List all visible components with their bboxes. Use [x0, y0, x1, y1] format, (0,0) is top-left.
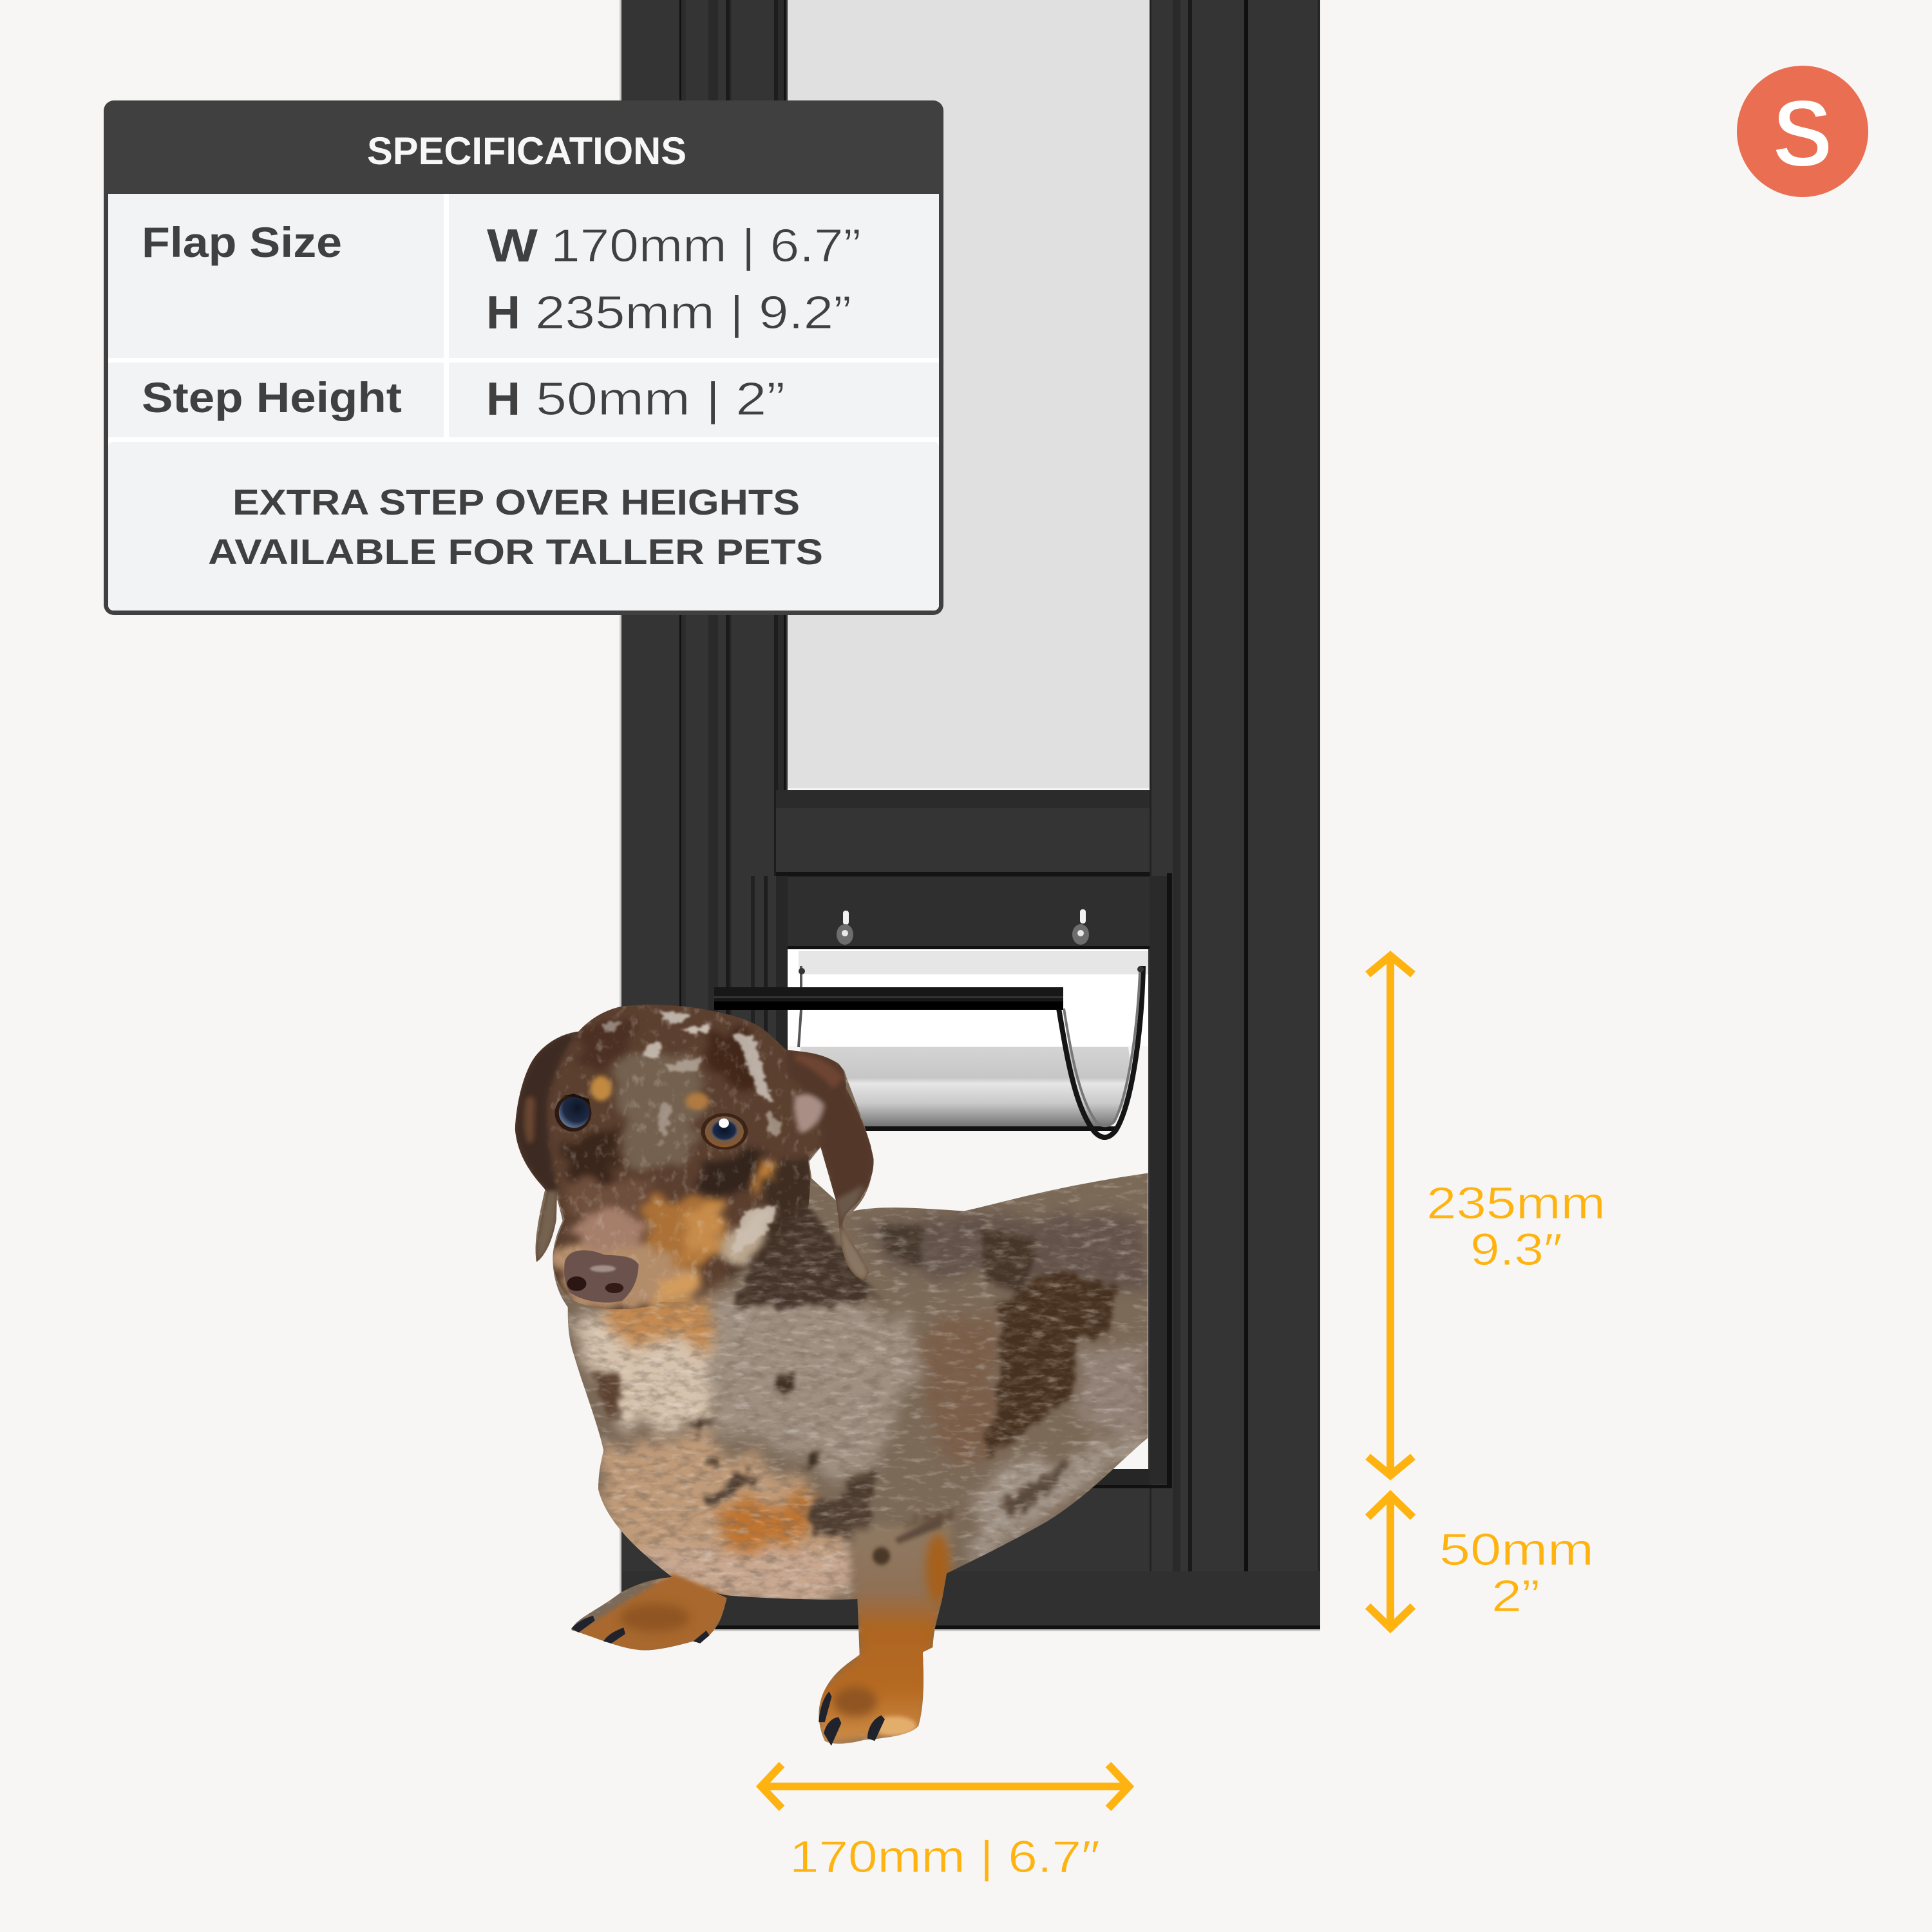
note: EXTRA STEP OVER HEIGHTS — [232, 482, 800, 522]
fur texture — [536, 1052, 1148, 1736]
right ear — [786, 1050, 874, 1280]
legs — [568, 1514, 952, 1746]
right eye — [701, 1113, 748, 1150]
head colouring — [548, 1018, 815, 1314]
flap bar — [714, 987, 1063, 1010]
note — [208, 482, 823, 572]
value: step height: 50mm | 2” — [536, 374, 785, 425]
label: flap width: 170mm | 6.7″ — [790, 1832, 1100, 1882]
cross rail — [776, 790, 1150, 876]
value: width: W — [487, 220, 538, 272]
table body — [108, 194, 939, 611]
head fur texture — [502, 992, 884, 1327]
body colouring — [568, 1218, 1147, 1603]
left ear — [515, 1032, 579, 1262]
head base — [515, 1005, 874, 1310]
bottom rail of opening — [788, 1469, 1150, 1487]
label: flap height — [1426, 1178, 1605, 1274]
dog body — [536, 1005, 1148, 1746]
size badge: S — [1772, 80, 1833, 187]
label: flap height: 9.3″ — [1470, 1224, 1562, 1274]
door frame — [620, 0, 1320, 1631]
gap beside ear — [809, 1148, 836, 1200]
flap rim left — [799, 966, 801, 1047]
dog head — [515, 1005, 874, 1310]
label: flap height: 235mm — [1426, 1178, 1605, 1228]
arrow: step height — [1368, 1494, 1413, 1629]
claws — [571, 1616, 885, 1746]
arrow: flap height — [1368, 954, 1413, 1477]
opening — [788, 949, 1148, 1469]
label: step height: 50mm — [1439, 1524, 1594, 1575]
value: step height: H — [486, 374, 520, 425]
flap rim right — [1059, 966, 1143, 1137]
size badge — [1737, 66, 1868, 197]
left eye — [554, 1094, 591, 1132]
bolt right — [1072, 909, 1089, 945]
flap — [714, 949, 1148, 1137]
label: step height: 2” — [1492, 1571, 1540, 1621]
head highlights — [604, 1010, 782, 1258]
value: height: 235mm | 9.2” — [535, 287, 851, 339]
nose — [564, 1250, 639, 1303]
side flanges — [751, 873, 1172, 1488]
value: step height — [486, 374, 785, 425]
dog — [489, 992, 1156, 1751]
panel: specifications — [104, 100, 943, 615]
glass panel — [788, 0, 1150, 790]
value: height: H — [486, 287, 520, 339]
label: step height — [1439, 1524, 1594, 1621]
row label: step height: Step Height — [142, 374, 402, 421]
dog base coat — [536, 1005, 1148, 1744]
tan eyebrows — [591, 1076, 709, 1110]
flap housing top — [785, 876, 1150, 949]
value: width: 170mm | 6.7” — [551, 220, 861, 272]
heading: SPECIFICATIONS — [367, 129, 687, 173]
arrow: flap width — [760, 1765, 1130, 1808]
note: AVAILABLE FOR TALLER PETS — [208, 531, 823, 572]
bolt left — [837, 911, 853, 945]
row label: flap size: Flap Size — [142, 218, 342, 266]
